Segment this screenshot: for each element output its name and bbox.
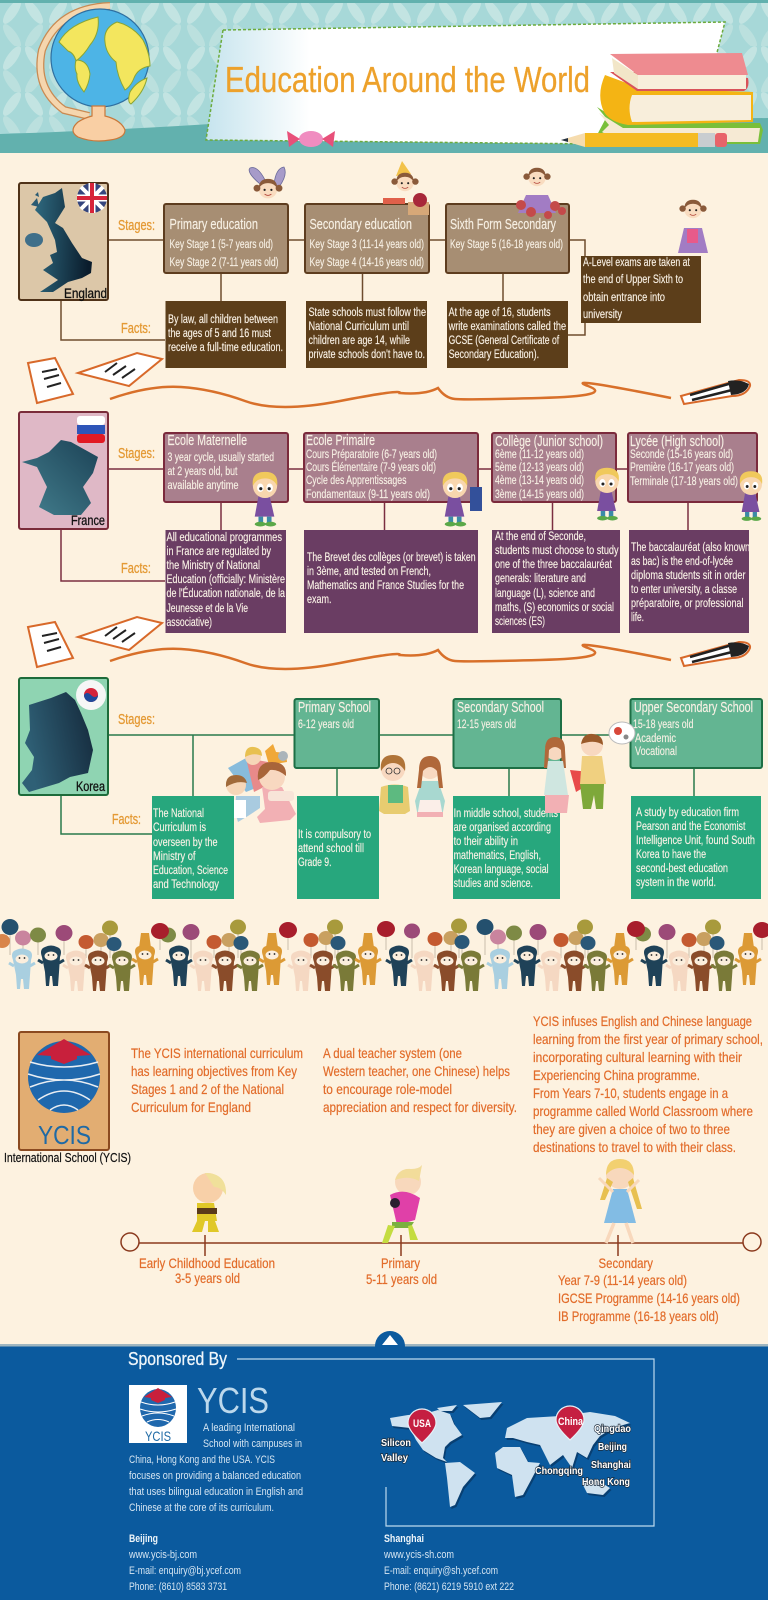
fact: state schools: State schools must follow the — [308, 305, 426, 319]
stage: Primary education: Primary education — [170, 217, 258, 233]
panel: sponsor footer — [0, 1331, 768, 1600]
fact: Pearson study: system in the world. — [636, 875, 716, 889]
fact: ministry: Education (officially: Ministère — [166, 572, 285, 586]
text: sponsor description: School with campuses in — [203, 1438, 302, 1450]
text: language learning: they are given a choice of two to three — [533, 1121, 730, 1137]
stage: Upper Secondary School — [630, 699, 762, 768]
label: Secondary: Year 7-9 (11-14 years old) — [558, 1272, 687, 1288]
panel: France — [19, 412, 762, 633]
header banner — [0, 0, 768, 153]
banner ribbon — [206, 22, 725, 145]
text: curriculum objectives: Curriculum for England — [131, 1099, 251, 1115]
fact: middle school: are organised according — [454, 820, 551, 834]
stage: Sixth Form Secondary — [446, 204, 569, 273]
fact: ministry: the Ministry of National — [166, 558, 260, 572]
country card: France: France — [71, 512, 105, 528]
fact: curriculum: Ministry of — [153, 849, 196, 863]
label: stages: Stages: — [118, 712, 155, 728]
text: language learning — [533, 1013, 763, 1155]
divider: papers and pencil — [28, 617, 750, 669]
stage: Ecole Maternelle: available anytime — [168, 478, 239, 492]
text: dual teacher system: to encourage role-model — [323, 1081, 452, 1097]
stage: Upper Secondary School: 15-18 years old — [633, 717, 694, 731]
fact: brevet — [304, 530, 478, 633]
fact: ministry: Jeunesse et de la Vie — [166, 601, 248, 615]
stage: Upper Secondary School: Academic — [635, 731, 676, 745]
stage: Lycée — [628, 433, 757, 502]
stage: Primary education — [164, 204, 288, 273]
stage: Primary education: Key Stage 1 (5-7 years old) — [170, 237, 273, 251]
red book — [610, 72, 748, 91]
label: Primary: Primary — [381, 1255, 420, 1271]
contact: Shanghai: Shanghai — [384, 1533, 424, 1545]
pin: China — [556, 1406, 584, 1440]
fact: ministry: de l'Éducation nationale, de la — [166, 585, 285, 600]
label: facts: Facts: — [121, 321, 151, 337]
stage: Secondary School — [454, 699, 561, 768]
fact: law: By law, all children between — [168, 312, 278, 326]
panel: England — [19, 161, 708, 368]
fact: baccalauréat: life. — [631, 610, 644, 624]
contact: Beijing: Phone: (8610) 8583 3731 — [129, 1581, 227, 1593]
stage: Secondary education: Key Stage 3 (11-14 years old) — [310, 237, 424, 251]
stage: Primary School — [294, 699, 379, 768]
panel: YCIS logo: YCIS — [38, 1120, 91, 1150]
fact: A-Level — [581, 255, 701, 323]
stage: Collège: 6ème (11-12 years old) — [495, 447, 584, 461]
fact: ministry — [166, 530, 286, 633]
fact: brevet: The Brevet des collèges (or brevet) is taken — [307, 550, 476, 564]
fact: middle school: studies and science. — [454, 876, 533, 890]
fact: state schools: private schools don't have to. — [308, 347, 425, 361]
stage: Collège — [492, 433, 616, 502]
animals — [9, 933, 761, 991]
fact: state schools: National Curriculum until — [308, 319, 409, 333]
pin: USA — [408, 1409, 436, 1443]
stage: Lycée: Lycée (High school) — [630, 434, 724, 450]
fact: Pearson study — [631, 796, 761, 899]
label: Early Childhood Education — [139, 1255, 275, 1286]
fact: compulsory: attend school till — [298, 841, 364, 855]
fact: baccalauréat generals: language (L), science and — [495, 586, 595, 600]
icon: girl with gift — [678, 200, 708, 253]
fact: baccalauréat generals: generals: literature and — [495, 571, 586, 585]
label: Early Childhood Education: Early Childhood Education — [139, 1255, 275, 1271]
fact: middle school: In middle school, students — [454, 806, 558, 820]
stage: Ecole Primaire: Cours Préparatoire (6-7 years old) — [306, 447, 437, 461]
contact: Shanghai — [383, 1533, 514, 1593]
city labels: Shanghai — [591, 1459, 631, 1471]
fact: curriculum — [152, 796, 234, 899]
icon: books and pencil — [561, 53, 763, 147]
contact: Beijing: E-mail: enquiry@bj.ycef.com — [129, 1565, 241, 1577]
sponsor logo: YCIS — [145, 1428, 171, 1444]
city labels: Hong Kong — [582, 1476, 630, 1488]
fact: compulsory: Grade 9. — [298, 855, 332, 869]
text: sponsor description: China, Hong Kong and the USA. YCIS — [129, 1454, 275, 1466]
panel: YCIS logo — [19, 1032, 109, 1150]
fact: ministry: associative) — [166, 615, 212, 629]
stage: Sixth Form Secondary: Key Stage 5 (16-18 years old) — [450, 237, 563, 251]
text: curriculum objectives: has learning objectives from Key — [131, 1063, 297, 1079]
stage: Ecole Primaire — [304, 433, 478, 502]
fact: baccalauréat generals — [492, 529, 620, 633]
fact: state schools: children are age 14, while — [308, 333, 410, 347]
country card: England: England — [64, 285, 107, 301]
text: sponsor description: A leading International — [203, 1422, 295, 1434]
contact: Shanghai: www.ycis-sh.com — [383, 1549, 454, 1561]
fact: curriculum: and Technology — [153, 877, 220, 891]
divider: papers and pencil — [28, 353, 750, 407]
icon: two children — [379, 755, 445, 817]
fact: curriculum: overseen by the — [153, 835, 218, 849]
stage: Secondary education — [305, 204, 429, 273]
text: sponsor description — [129, 1422, 303, 1514]
icon: candy — [287, 131, 335, 147]
icon: girl with toy — [382, 1165, 422, 1243]
balloons — [0, 918, 768, 951]
city labels: Chongqing — [535, 1465, 583, 1477]
icon: boy 3 — [595, 468, 619, 520]
fact: baccalauréat generals: sciences (ES) — [495, 614, 545, 628]
country card: France — [19, 412, 108, 529]
heading: Sponsored By: Sponsored By — [128, 1349, 227, 1369]
fact: middle school: mathematics, English, — [454, 848, 541, 862]
icon: boy 4 — [740, 471, 762, 521]
city labels — [381, 1423, 631, 1488]
fact: middle school — [453, 796, 560, 899]
panel: Korea — [19, 678, 762, 899]
text: sponsor description: focuses on providing a balanced education — [129, 1470, 301, 1482]
contact: Beijing: Beijing — [129, 1533, 158, 1545]
fact: ministry: All educational programmes — [166, 530, 282, 544]
fact: baccalauréat generals: one of the three baccalauréat — [495, 557, 612, 571]
label: Secondary: Secondary — [598, 1255, 653, 1271]
stage: Secondary education: Secondary education — [310, 217, 412, 233]
fact: curriculum: The National — [153, 806, 204, 820]
contact: Beijing — [128, 1533, 241, 1593]
stage: Ecole Primaire: Cycle des Apprentissages — [306, 473, 406, 487]
sponsor logo — [129, 1385, 187, 1444]
fact: GCSE: write examinations called the — [448, 319, 566, 333]
fact: A-Level: university — [583, 307, 623, 321]
fact: compulsory — [297, 796, 379, 899]
fact: GCSE — [447, 301, 568, 368]
stage: Ecole Primaire: Fondamentaux (9-11 years old) — [306, 487, 430, 501]
label: stages: Stages: — [118, 446, 155, 462]
pin: USA: USA — [413, 1418, 431, 1430]
city labels: Qingdao — [594, 1423, 631, 1435]
fact: state schools — [306, 301, 427, 368]
text: curriculum objectives: Stages 1 and 2 of the National — [131, 1081, 284, 1097]
icon: boy 2 — [443, 472, 482, 526]
text: dual teacher system: A dual teacher system (one — [323, 1045, 462, 1061]
text: sponsor description: that uses bilingual education in English and — [129, 1486, 303, 1498]
text: curriculum objectives: The YCIS international curriculum — [131, 1045, 303, 1061]
country card: England — [19, 183, 108, 301]
stage: Ecole Maternelle: Ecole Maternelle — [168, 433, 247, 449]
timeline — [121, 1159, 761, 1324]
label: Early Childhood Education: 3-5 years old — [175, 1270, 240, 1286]
text: sponsor description: Chinese at the core of its curriculum. — [129, 1502, 274, 1514]
fact: GCSE: GCSE (General Certificate of — [449, 333, 560, 347]
stage: Ecole Maternelle: at 2 years old, but — [168, 464, 238, 478]
fact: A-Level: the end of Upper Sixth to — [583, 272, 683, 286]
connector lines — [61, 469, 688, 581]
fact: A-Level: obtain entrance into — [583, 290, 665, 304]
text: language learning: From Years 7-10, students engage in a — [533, 1085, 728, 1101]
fact: brevet: in 3ème, and tested on French, — [307, 564, 431, 578]
fact: GCSE: Secondary Education). — [449, 347, 539, 361]
text: dual teacher system: Western teacher, one Chinese) helps — [323, 1063, 510, 1079]
stage: Ecole Primaire: Ecole Primaire — [306, 433, 375, 449]
fact: A-Level: A-Level exams are taken at — [583, 255, 690, 269]
icon: group of children — [226, 744, 296, 823]
frame line — [237, 1359, 654, 1526]
icon: bunny girl — [249, 167, 285, 198]
stage: Collège: 4ème (13-14 years old) — [495, 473, 584, 487]
city labels: Silicon — [381, 1437, 411, 1449]
fact: compulsory: It is compulsory to — [298, 827, 371, 841]
stage: Primary School: Primary School — [298, 700, 371, 716]
fact: baccalauréat generals: At the end of Seconde, — [495, 529, 586, 543]
stage: Ecole Primaire: Cours Élémentaire (7-9 years old) — [306, 459, 436, 474]
contact: Beijing: www.ycis-bj.com — [128, 1549, 197, 1561]
stage: Secondary School: Secondary School — [457, 700, 544, 716]
text: dual teacher system — [323, 1045, 517, 1115]
fact: baccalauréat — [629, 530, 750, 633]
label: facts: Facts: — [112, 812, 141, 828]
stage: Primary School: 6-12 years old — [298, 717, 354, 731]
fact: curriculum: Education, Science — [153, 863, 228, 877]
contact: Shanghai: E-mail: enquiry@sh.ycef.com — [384, 1565, 498, 1577]
connector lines — [61, 735, 694, 834]
text: language learning: Experiencing China programme. — [533, 1067, 700, 1083]
fact: law: receive a full-time education. — [168, 340, 283, 354]
label: Primary: 5-11 years old — [366, 1271, 437, 1287]
sponsor wordmark: YCIS — [197, 1380, 269, 1421]
contact: Shanghai: Phone: (8621) 6219 5910 ext 222 — [384, 1581, 514, 1593]
stage: Collège: 5ème (12-13 years old) — [495, 460, 584, 474]
yellow book — [600, 75, 753, 125]
fact: baccalauréat generals: maths, (S) economics or social — [495, 600, 614, 614]
country card: Korea — [19, 678, 108, 795]
icon: baby — [192, 1173, 226, 1232]
label: stages: Stages: — [118, 218, 155, 234]
city labels: Beijing — [598, 1441, 627, 1453]
stage: Collège: Collège (Junior school) — [495, 434, 603, 450]
fact: law: the ages of 5 and 16 must — [168, 326, 271, 340]
fact: GCSE: At the age of 16, students — [449, 305, 551, 319]
green book — [597, 107, 763, 144]
stage: Sixth Form Secondary: Sixth Form Secondary — [450, 217, 557, 233]
stage: Upper Secondary School: Vocational — [635, 744, 677, 758]
text: dual teacher system: appreciation and respect for diversity. — [323, 1099, 517, 1115]
logo caption: International School (YCIS) — [4, 1151, 131, 1165]
icon: girl with dress — [599, 1159, 642, 1243]
label: Secondary: IB Programme (16-18 years old) — [558, 1308, 719, 1324]
country card: Korea: Korea — [76, 778, 105, 794]
icon: party girl — [383, 161, 429, 215]
fact: curriculum: Curriculum is — [153, 820, 206, 834]
stage: Secondary education: Key Stage 4 (14-16 years old) — [310, 255, 424, 269]
stage: Ecole Maternelle — [164, 433, 288, 502]
fact: law — [166, 301, 286, 368]
text: curriculum objectives — [131, 1045, 303, 1115]
connector lines — [61, 240, 585, 340]
pencil — [561, 133, 585, 147]
decorative band: animals with balloons — [0, 918, 768, 991]
icon: boy 1 — [253, 472, 277, 526]
icon: up arrow tab — [375, 1331, 405, 1361]
stage: Primary education: Key Stage 2 (7-11 years old) — [170, 255, 278, 269]
stage: Ecole Maternelle: 3 year cycle, usually started — [168, 450, 274, 464]
label: Secondary — [558, 1255, 740, 1324]
icon: girl with flowers — [516, 168, 566, 219]
fact: brevet: exam. — [307, 592, 332, 606]
stage: Collège: 3ème (14-15 years old) — [495, 487, 584, 501]
fact: Pearson study: second-best education — [636, 861, 728, 875]
title: Education Around the World — [225, 59, 590, 100]
label: Primary — [366, 1255, 437, 1287]
label: facts: Facts: — [121, 561, 151, 577]
city labels: Valley — [381, 1452, 408, 1464]
fact: brevet: Mathematics and France Studies for the — [307, 578, 464, 592]
pin: China: China — [558, 1416, 584, 1428]
fact: ministry: in France are regulated by — [166, 544, 272, 558]
fact: baccalauréat generals: students must choose to study — [495, 543, 619, 557]
fact: Pearson study: Korea to have the — [636, 847, 706, 861]
fact: middle school: Korean language, social — [454, 862, 549, 876]
stage: Secondary School: 12-15 years old — [457, 717, 516, 731]
icon: two students with speech bubble — [544, 722, 635, 813]
world map — [381, 1402, 632, 1509]
fact: middle school: to their ability in — [454, 834, 518, 848]
icon: globe — [40, 6, 150, 141]
